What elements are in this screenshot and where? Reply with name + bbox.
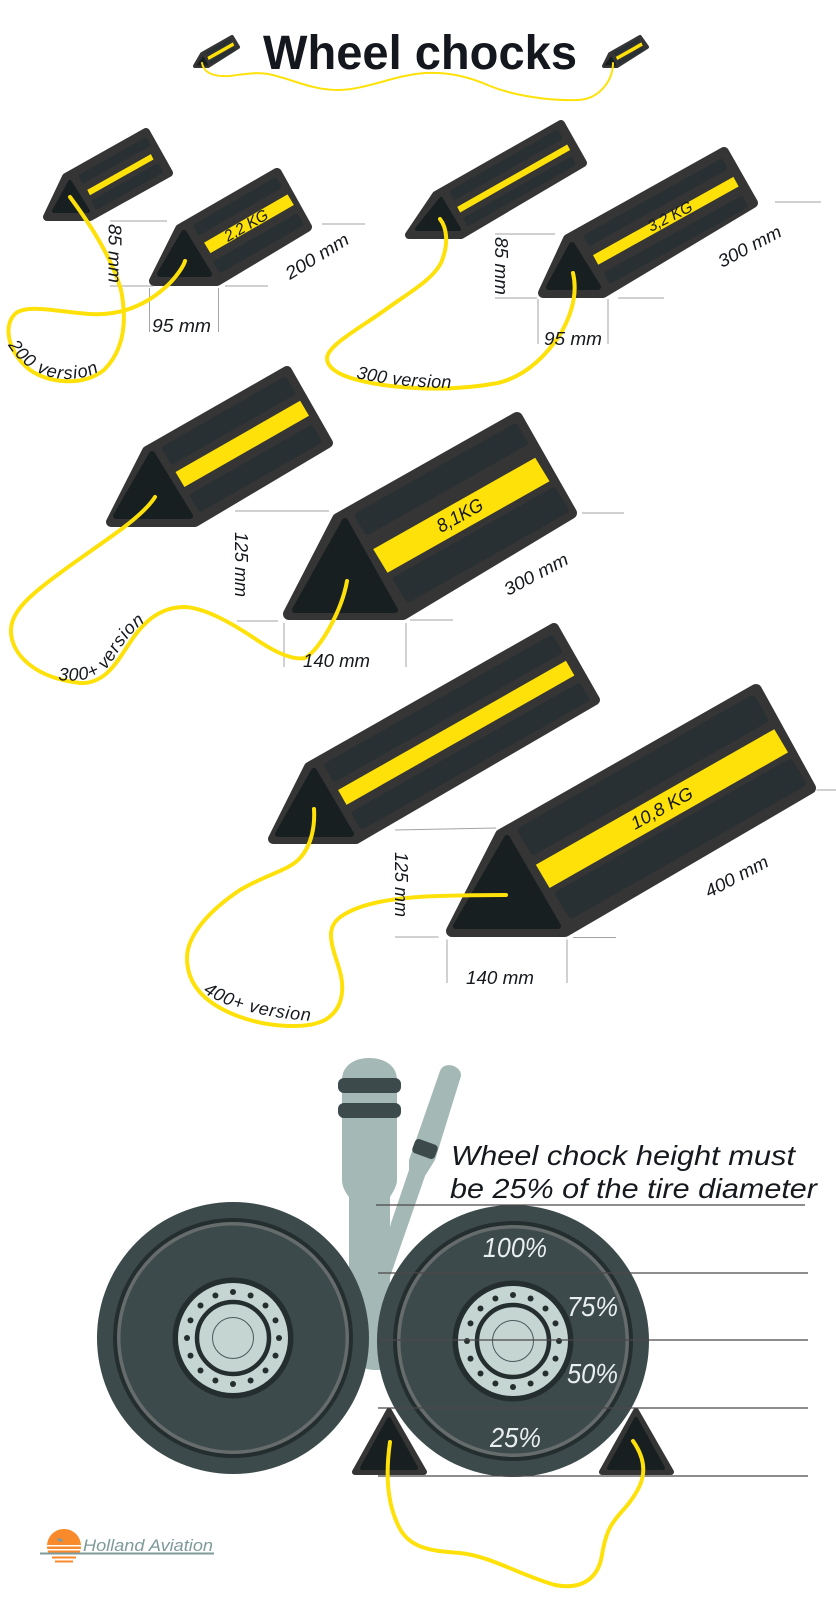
label: 300+ version: 300+ version (58, 616, 144, 681)
label: 125 mm (400+): 125 mm (391, 852, 411, 917)
cord: title (202, 63, 613, 100)
percent label: 75%: 75% (567, 1291, 618, 1322)
callout: height rule: be 25% of the tire diameter (450, 1173, 819, 1204)
cord: 300+ version (11, 497, 347, 683)
chock: 300+ back (111, 371, 328, 522)
label: 2,2 KG: 2,2 KG (221, 207, 272, 246)
label: 95 mm (200): 95 mm (152, 316, 211, 336)
cord: 200 version (8, 197, 185, 381)
title: Wheel chocks (263, 27, 577, 80)
height reference lines (376, 1205, 808, 1476)
label: 140 mm (300+): 140 mm (303, 651, 370, 671)
label: 300 mm: 300 mm (714, 221, 785, 272)
chock: 200 front (154, 173, 307, 281)
chock: 300 back (409, 124, 583, 235)
label: 400+ version: 400+ version (204, 986, 310, 1021)
dimension lines (110, 202, 836, 983)
label: 400 mm: 400 mm (701, 851, 772, 902)
label: 200 version: 200 version (8, 340, 97, 380)
label: 10,8 KG: 10,8 KG (627, 783, 696, 833)
label: 300 version: 300 version (356, 366, 451, 388)
callout: height rule: Wheel chock height must (451, 1140, 796, 1171)
chock under wheel: left (349, 1405, 430, 1477)
landing gear strut (338, 1058, 461, 1370)
label: 200 mm: 200 mm (281, 229, 353, 284)
label: 85 mm (300): 85 mm (491, 237, 511, 295)
cord: 400+ version (187, 809, 506, 1026)
percent label: 100%: 100% (483, 1232, 547, 1263)
callout: height rule (450, 1140, 819, 1204)
wheel: right (377, 1205, 649, 1477)
label: 125 mm (300+): 125 mm (231, 532, 251, 597)
chock: 200 back (47, 132, 169, 217)
chock: 300+ front (289, 418, 571, 614)
label: 3,2 KG: 3,2 KG (645, 199, 696, 236)
cord: gear chocks (388, 1441, 643, 1586)
percent label: 25%: 25% (489, 1422, 541, 1453)
logo: Holland Aviation: Holland Aviation (83, 1536, 213, 1555)
icon: small chock right (604, 37, 647, 66)
icon: small chock left (195, 37, 238, 66)
wheel: left (97, 1202, 369, 1474)
label: 95 mm (300): 95 mm (544, 329, 602, 349)
chock: 400+ front (452, 690, 810, 931)
chock: 400+ back (273, 628, 595, 839)
label: 8,1KG: 8,1KG (433, 495, 487, 537)
percent label: 50%: 50% (567, 1358, 618, 1389)
label: 140 mm (400+): 140 mm (466, 968, 534, 988)
label: 85 mm (200): 85 mm (104, 224, 124, 283)
chock: 300 front (543, 152, 753, 293)
logo: Holland Aviation (40, 1529, 214, 1562)
label: 300 mm (300+): 300 mm (500, 549, 572, 600)
chock under wheel: right (596, 1405, 677, 1477)
cord: 300 version (327, 219, 575, 389)
